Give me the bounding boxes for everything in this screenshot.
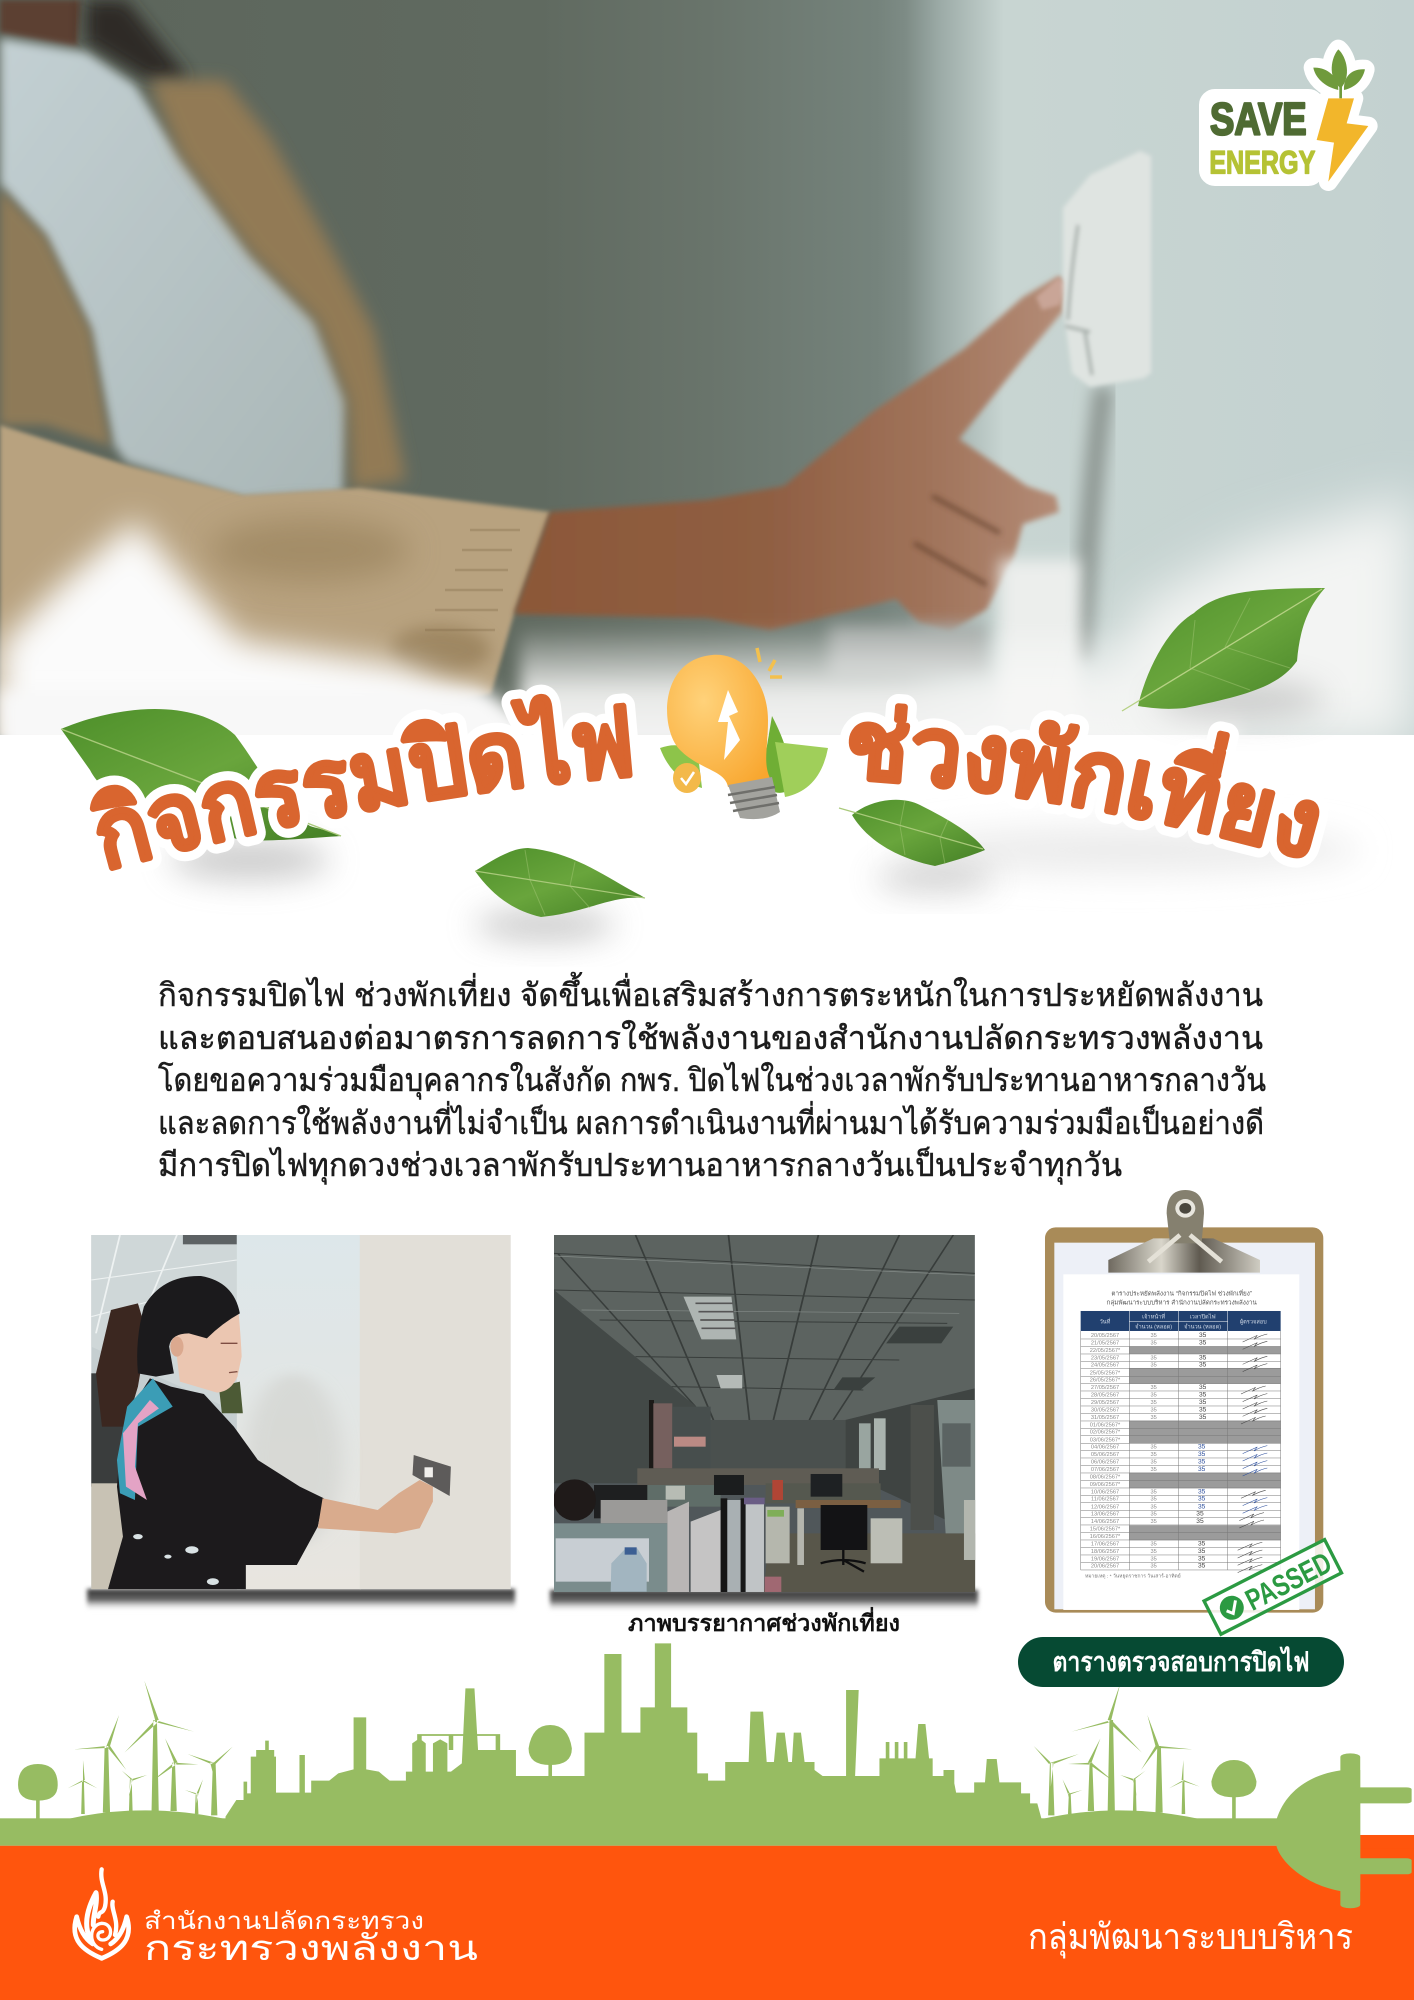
wall switch: [1063, 151, 1151, 660]
title fill: กิจกรรมปิดไฟ: [90, 694, 633, 871]
table dates: 18/06/2567: [1091, 1549, 1119, 1555]
table dates: 09/06/2567*: [1090, 1482, 1121, 1488]
table handwritten counts: 35: [1198, 1466, 1206, 1473]
flame emblem: [75, 1869, 129, 1958]
department name: สำนักงานปลัดกระทรวง: [144, 1908, 424, 1935]
table staff counts: 35: [1151, 1504, 1157, 1510]
table staff counts: 35: [1151, 1340, 1157, 1346]
leaf: left behind title: [61, 709, 341, 880]
table handwritten counts: 35: [1199, 1332, 1207, 1339]
clipboard with check table: [1045, 1190, 1342, 1635]
pill label: check table: [1018, 1637, 1344, 1687]
table handwritten counts: 35: [1199, 1399, 1207, 1406]
intro paragraph: มีการปิดไฟทุกดวงช่วงเวลาพักรับประทานอาหารกลางวันเป็นประจำทุกวัน: [158, 1146, 1122, 1185]
table dates: 07/06/2567: [1091, 1467, 1119, 1473]
table handwritten counts: 35: [1199, 1392, 1207, 1399]
table grey holiday rows: [1129, 1347, 1281, 1540]
table dates: [1090, 1333, 1121, 1570]
table title: [1107, 1288, 1257, 1306]
table handwritten counts: 35: [1198, 1563, 1206, 1570]
table staff counts: 35: [1151, 1519, 1157, 1525]
table dates: 10/06/2567: [1091, 1489, 1119, 1495]
fog: [508, 626, 1212, 735]
photo caption: ภาพบรรยากาศช่วงพักเที่ยง: [628, 1606, 900, 1636]
table handwritten counts: 35: [1196, 1511, 1204, 1518]
leaf: upper right: [1120, 588, 1325, 718]
table handwritten counts: 35: [1199, 1406, 1207, 1413]
table staff counts: 35: [1151, 1407, 1157, 1413]
icon: light bulb with leaves: [660, 648, 828, 819]
hero photo: finger pressing light switch: [0, 0, 1414, 750]
table handwritten counts: 35: [1198, 1548, 1206, 1555]
table staff counts: 35: [1151, 1415, 1157, 1421]
table header: ผู้ตรวจสอบ: [1240, 1318, 1267, 1325]
leaf: right below title: [839, 800, 995, 890]
table dates: 16/06/2567*: [1090, 1534, 1121, 1540]
table staff counts: 35: [1151, 1452, 1157, 1458]
table footnote: หมายเหตุ : * วันหยุดราชการ วันเสาร์-อาทิตย์: [1085, 1572, 1181, 1579]
title outline: กิจกรรมปิดไฟ: [97, 684, 638, 862]
table staff counts: 35: [1151, 1445, 1157, 1451]
table dates: 23/05/2567: [1091, 1355, 1119, 1361]
intro paragraph: กิจกรรมปิดไฟ ช่วงพักเที่ยง จัดขึ้นเพื่อเสริมสร้างการตระหนักในการประหยัดพลังงาน: [158, 972, 1263, 1013]
skyline with wind turbines and plug: [0, 1643, 1414, 2000]
plug: [1276, 1753, 1412, 1908]
table handwritten counts: 35: [1198, 1488, 1206, 1495]
table dates: 03/06/2567*: [1090, 1437, 1121, 1443]
table dates: 13/06/2567: [1091, 1512, 1119, 1518]
wind turbines right: [1034, 1683, 1200, 1815]
photo: darkened office at lunch break: [550, 1235, 978, 1612]
table dates: 05/06/2567: [1091, 1452, 1119, 1458]
table dates: 28/05/2567: [1091, 1393, 1119, 1399]
soft grey shading under title: [900, 826, 1360, 874]
photo: woman switching off the light: [87, 1235, 515, 1611]
passed stamp: [1204, 1540, 1342, 1635]
title outline: ช่วงพักเที่ยง: [840, 694, 1322, 868]
save text: SAVE: [1210, 93, 1307, 144]
table dates: 15/06/2567*: [1090, 1527, 1121, 1533]
factories silhouette: [226, 1643, 1042, 1820]
table header: [1081, 1311, 1281, 1331]
passed stamp: PASSED: [1240, 1546, 1337, 1617]
wind turbines left: [68, 1681, 233, 1815]
title fill: [90, 694, 1320, 871]
table staff counts: 35: [1151, 1460, 1157, 1466]
table header: จำนวน (หลอด): [1135, 1323, 1172, 1330]
table handwritten counts: 35: [1199, 1384, 1207, 1391]
table dates: 26/05/2567*: [1090, 1378, 1121, 1384]
table staff counts: 35: [1151, 1541, 1157, 1547]
table handwritten counts: 35: [1199, 1339, 1207, 1346]
table handwritten counts: 35: [1196, 1518, 1204, 1525]
table handwritten counts: [1196, 1332, 1207, 1570]
table handwritten counts: 35: [1198, 1540, 1206, 1547]
table grid: [1081, 1331, 1281, 1570]
table staff counts: 35: [1151, 1549, 1157, 1555]
intro paragraph: และลดการใช้พลังงานที่ไม่จำเป็น ผลการดำเนินงานที่ผ่านมาได้รับความร่วมมือเป็นอย่างดี: [158, 1101, 1264, 1141]
title: curved headline: [90, 684, 1322, 871]
energy text: ENERGY: [1209, 144, 1315, 180]
table dates: 06/06/2567: [1091, 1460, 1119, 1466]
table header: เวลาปิดไฟ: [1190, 1314, 1216, 1321]
logo: save energy sticker: [1205, 49, 1368, 182]
table handwritten counts: 35: [1198, 1459, 1206, 1466]
bulb screw base: [728, 777, 780, 819]
table staff counts: 35: [1151, 1467, 1157, 1473]
table dates: 11/06/2567: [1091, 1497, 1119, 1503]
leaf: lower centre: [475, 848, 645, 939]
table dates: 04/06/2567: [1091, 1445, 1119, 1451]
table handwritten counts: 35: [1199, 1362, 1207, 1369]
table title: ตารางประหยัดพลังงาน “กิจกรรมปิดไฟ ช่วงพักเที่ยง”: [1111, 1288, 1252, 1297]
table handwritten counts: 35: [1198, 1503, 1206, 1510]
intro paragraph: [158, 972, 1266, 1185]
table staff counts: 35: [1151, 1564, 1157, 1570]
table title: กลุ่มพัฒนาระบบบริหาร สำนักงานปลัดกระทรวงพลังงาน: [1107, 1298, 1257, 1306]
ministry name: กระทรวงพลังงาน: [144, 1929, 478, 1968]
table staff counts: 35: [1151, 1363, 1157, 1369]
orange footer band: [0, 1835, 1414, 2000]
table dates: 29/05/2567: [1091, 1400, 1119, 1406]
sprout leaves: [1313, 49, 1365, 98]
lightning bolt: [1317, 98, 1368, 182]
table dates: 22/05/2567*: [1090, 1348, 1121, 1354]
coin check: [673, 763, 701, 793]
table dates: 01/06/2567*: [1090, 1422, 1121, 1428]
table staff counts: 35: [1151, 1355, 1157, 1361]
table dates: 25/05/2567*: [1090, 1370, 1121, 1376]
footer division name: กลุ่มพัฒนาระบบบริหาร: [1028, 1916, 1353, 1959]
table handwritten counts: 35: [1199, 1354, 1207, 1361]
cardigan sleeve: [0, 425, 550, 735]
table staff counts: [1151, 1333, 1157, 1570]
title fill: ช่วงพักเที่ยง: [848, 703, 1320, 858]
table staff counts: 35: [1151, 1512, 1157, 1518]
table dates: 19/06/2567: [1091, 1556, 1119, 1562]
table staff counts: 35: [1151, 1333, 1157, 1339]
table signatures: [1238, 1334, 1267, 1573]
table dates: 14/06/2567: [1091, 1519, 1119, 1525]
table header: เจ้าหน้าที่: [1142, 1313, 1165, 1321]
table dates: 02/06/2567*: [1090, 1430, 1121, 1436]
title outline: [97, 684, 1322, 868]
table staff counts: 35: [1151, 1400, 1157, 1406]
trees: [18, 1725, 1256, 1819]
table dates: 08/06/2567*: [1090, 1474, 1121, 1480]
table header: จำนวน (หลอด): [1184, 1323, 1221, 1330]
table dates: 21/05/2567: [1091, 1340, 1119, 1346]
table dates: 17/06/2567: [1091, 1541, 1119, 1547]
table dates: 20/06/2567: [1091, 1564, 1119, 1570]
table dates: 24/05/2567: [1091, 1363, 1119, 1369]
table dates: 30/05/2567: [1091, 1407, 1119, 1413]
pill label: check table: ตารางตรวจสอบการปิดไฟ: [1052, 1646, 1310, 1677]
table handwritten counts: 35: [1198, 1451, 1206, 1458]
bulb glass: [667, 655, 772, 787]
intro paragraph: โดยขอความร่วมมือบุคลากรในสังกัด กพร. ปิดไฟในช่วงเวลาพักรับประทานอาหารกลางวัน: [158, 1062, 1266, 1100]
logo: ministry of energy: [75, 1869, 478, 1968]
table staff counts: 35: [1151, 1497, 1157, 1503]
table dates: 20/05/2567: [1091, 1333, 1119, 1339]
table staff counts: 35: [1151, 1385, 1157, 1391]
table handwritten counts: 35: [1198, 1496, 1206, 1503]
table dates: 12/06/2567: [1091, 1504, 1119, 1510]
table handwritten counts: 35: [1198, 1444, 1206, 1451]
table dates: 27/05/2567: [1091, 1385, 1119, 1391]
metal clip: [1108, 1190, 1260, 1273]
table handwritten counts: 35: [1199, 1414, 1207, 1421]
spark rays: [757, 648, 782, 677]
table staff counts: 35: [1151, 1489, 1157, 1495]
hills: [68, 1810, 1200, 1819]
table handwritten counts: 35: [1198, 1555, 1206, 1562]
table staff counts: 35: [1151, 1393, 1157, 1399]
table dates: 31/05/2567: [1091, 1415, 1119, 1421]
table staff counts: 35: [1151, 1556, 1157, 1562]
intro paragraph: และตอบสนองต่อมาตรการลดการใช้พลังงานของสำนักงานปลัดกระทรวงพลังงาน: [158, 1020, 1263, 1056]
ground strip: [0, 1818, 1281, 1846]
hand: [514, 276, 1068, 632]
table header: วันที่: [1100, 1317, 1111, 1325]
